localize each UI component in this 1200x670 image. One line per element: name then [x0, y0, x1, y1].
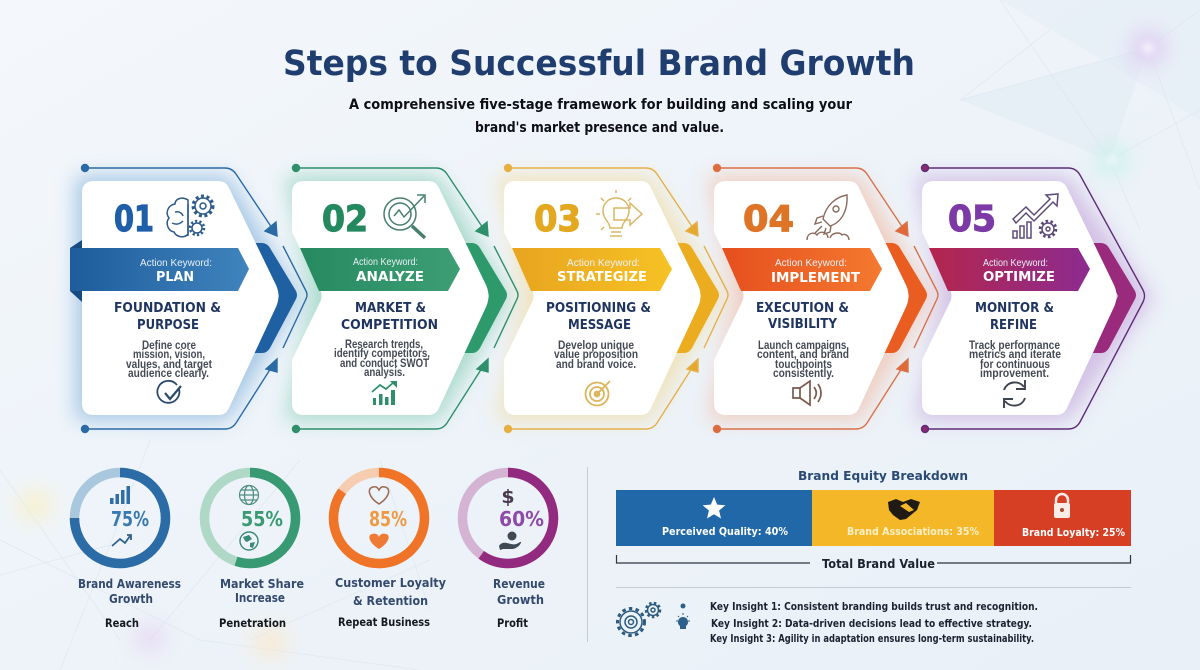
panel: brand equity breakdown: [616, 468, 1131, 546]
description: values, and target: [126, 359, 212, 371]
ribbon: [512, 248, 672, 291]
heading: EXECUTION &: [756, 301, 849, 316]
panel: step 3 strategize: STRATEGIZE: [557, 269, 647, 285]
ribbon fold: [70, 240, 82, 302]
panel: step 2 analyze: ANALYZE: [356, 269, 424, 285]
panel: step 2 analyze: COMPETITION: [341, 318, 438, 333]
icon: light bulb: [596, 190, 642, 236]
heading: MONITOR &: [975, 301, 1054, 316]
description: Develop unique: [558, 340, 634, 352]
connector arrows: [292, 164, 518, 432]
label: revenue: Revenue: [493, 577, 545, 591]
label: revenue: [493, 577, 545, 630]
label: revenue: Profit: [497, 616, 528, 630]
label: customer loyalty: Customer Loyalty: [335, 576, 446, 590]
description: improvement.: [980, 368, 1049, 380]
icon: lock: [1054, 494, 1070, 518]
label: customer loyalty: Repeat Business: [338, 615, 430, 629]
donut: brand awareness: 75%: [111, 507, 149, 531]
icon: target: [586, 381, 610, 406]
description: and conduct SWOT: [340, 358, 429, 370]
description: and brand voice.: [556, 359, 636, 371]
label: market share: Market Share: [220, 577, 304, 591]
chevron: [676, 243, 719, 353]
number: 04: [743, 199, 794, 240]
heading: MARKET &: [355, 301, 426, 316]
connector arrows: [82, 164, 307, 432]
card: [504, 181, 700, 415]
label: brand awareness: Growth: [109, 592, 153, 606]
icon: handshake: [888, 499, 920, 520]
key insights: [710, 600, 1038, 645]
icon: bars: [110, 486, 130, 504]
bracket: total brand value: [616, 555, 1130, 571]
segment: perceived quality: Perceived Quality: 40%: [662, 525, 788, 538]
label: brand awareness: Brand Awareness: [78, 577, 181, 591]
label: brand awareness: Reach: [105, 616, 139, 630]
description: Launch campaigns,: [758, 340, 849, 352]
segment: perceived quality: [616, 490, 812, 546]
description: touchpoints: [775, 359, 832, 371]
donut: revenue: [462, 472, 554, 564]
description: value proposition: [554, 349, 638, 361]
description: for continuous: [980, 359, 1050, 371]
label: market share: [219, 577, 304, 630]
connector arrows: [504, 164, 728, 432]
card: [714, 181, 908, 415]
description: Research trends,: [345, 339, 423, 351]
chevron: [884, 243, 927, 353]
icon: speaker: [793, 381, 821, 405]
chevron: [254, 243, 297, 353]
description: mission, vision,: [133, 349, 205, 361]
icon: brain and gears: [167, 196, 213, 237]
glows behind cards: [76, 176, 1152, 420]
heading: POSITIONING &: [546, 301, 651, 316]
icon: star: [703, 497, 725, 518]
icon: refresh: [1004, 380, 1025, 408]
icon: chart and gear: [1013, 194, 1058, 238]
keyword: Action Keyword:: [983, 258, 1048, 269]
panel: step 1 plan: PLAN: [156, 269, 194, 285]
number: 05: [948, 199, 996, 240]
key insights: Key Insight 3: Agility in adaptation ensures long-term sustainability.: [710, 633, 1034, 645]
segment: brand loyalty: Brand Loyalty: 25%: [1022, 526, 1125, 539]
card: [922, 181, 1116, 415]
donut: customer loyalty: [334, 472, 424, 564]
subtitle: A comprehensive five-stage framework for building and scaling your: [349, 97, 853, 113]
chevron: [464, 243, 507, 353]
donut: revenue: 60%: [499, 507, 544, 531]
donut: brand awareness: [74, 472, 166, 564]
key insights: Key Insight 1: Consistent branding builds trust and recognition.: [710, 600, 1038, 613]
panel: step 1 plan: [70, 164, 307, 432]
description: content, and brand: [757, 349, 849, 361]
icon: trend: [112, 535, 131, 546]
description: consistently.: [773, 368, 834, 380]
panel: step 3 strategize: [504, 164, 728, 432]
divider: [586, 467, 588, 642]
panel: step 4 implement: [714, 164, 938, 432]
keyword: Action Keyword:: [140, 258, 212, 269]
icon: globe grid: [240, 486, 258, 504]
icon: heart outline: [369, 487, 389, 504]
connector arrows: [714, 164, 938, 432]
donut: market share: 55%: [241, 507, 283, 531]
segment: brand associations: Brand Associations: 35%: [847, 525, 979, 538]
description: Track performance: [969, 340, 1060, 352]
description: [334, 339, 430, 379]
divider: [616, 586, 1131, 588]
icon: hand with coin: [499, 532, 521, 550]
subtitle: brand's market presence and value.: [475, 120, 724, 136]
ribbon: [300, 248, 460, 291]
ribbon: [929, 248, 1090, 291]
bracket: total brand value: Total Brand Value: [822, 556, 935, 571]
description: [969, 340, 1061, 380]
label: brand awareness: [78, 577, 181, 630]
icon: rocket: [807, 195, 849, 240]
label: market share: Increase: [235, 591, 285, 605]
icon: dot and bulb: [676, 604, 690, 629]
card: [82, 181, 278, 415]
panel: step 5 optimize: [922, 164, 1144, 432]
number: 03: [534, 199, 581, 240]
description: metrics and iterate: [969, 349, 1061, 361]
description: [126, 340, 212, 380]
segment: brand associations: [812, 490, 994, 546]
number: 01: [114, 199, 154, 240]
icon: magnifier: [384, 195, 425, 238]
icon: earth: [240, 532, 258, 550]
chevron: [1093, 243, 1136, 353]
label: customer loyalty: & Retention: [353, 594, 428, 608]
segment: brand loyalty: [994, 490, 1131, 546]
panel: step 2 analyze: [292, 164, 518, 432]
icon: gears: [618, 603, 660, 636]
description: [757, 340, 849, 380]
donut: market share: [204, 472, 296, 564]
ribbon: [722, 248, 882, 291]
heading: Brand Equity Breakdown: [798, 468, 968, 483]
icon: heart solid: [369, 534, 389, 549]
connector arrows: [922, 164, 1144, 432]
panel: step 5 optimize: OPTIMIZE: [983, 269, 1055, 285]
description: Define core: [142, 340, 196, 352]
panel: step 5 optimize: REFINE: [990, 318, 1037, 333]
panel: step 3 strategize: MESSAGE: [568, 318, 631, 333]
ribbon: [70, 248, 249, 291]
number: 02: [322, 199, 368, 240]
keyword: Action Keyword:: [353, 257, 418, 268]
description: audience clearly.: [128, 368, 209, 380]
panel: step 4 implement: IMPLEMENT: [771, 270, 861, 286]
icon: growth chart: [372, 381, 397, 405]
label: customer loyalty: [335, 576, 446, 629]
label: market share: Penetration: [219, 616, 286, 630]
label: revenue: Growth: [497, 593, 544, 607]
description: analysis.: [364, 367, 405, 379]
heading: FOUNDATION &: [114, 301, 221, 316]
keyword: Action Keyword:: [775, 258, 847, 269]
keyword: Action Keyword:: [567, 258, 640, 269]
icon: check: [157, 381, 181, 403]
description: identify competitors,: [334, 348, 430, 360]
card: [292, 181, 488, 415]
icon: dollar: $: [501, 486, 515, 508]
description: [554, 340, 638, 371]
title: Steps to Successful Brand Growth: [283, 44, 915, 84]
donut: customer loyalty: 85%: [369, 507, 407, 531]
panel: step 1 plan: PURPOSE: [137, 318, 199, 333]
panel: step 4 implement: VISIBILITY: [768, 317, 838, 332]
key insights: Key Insight 2: Data-driven decisions lead to effective strategy.: [711, 617, 1032, 630]
subtitle: [349, 97, 853, 136]
